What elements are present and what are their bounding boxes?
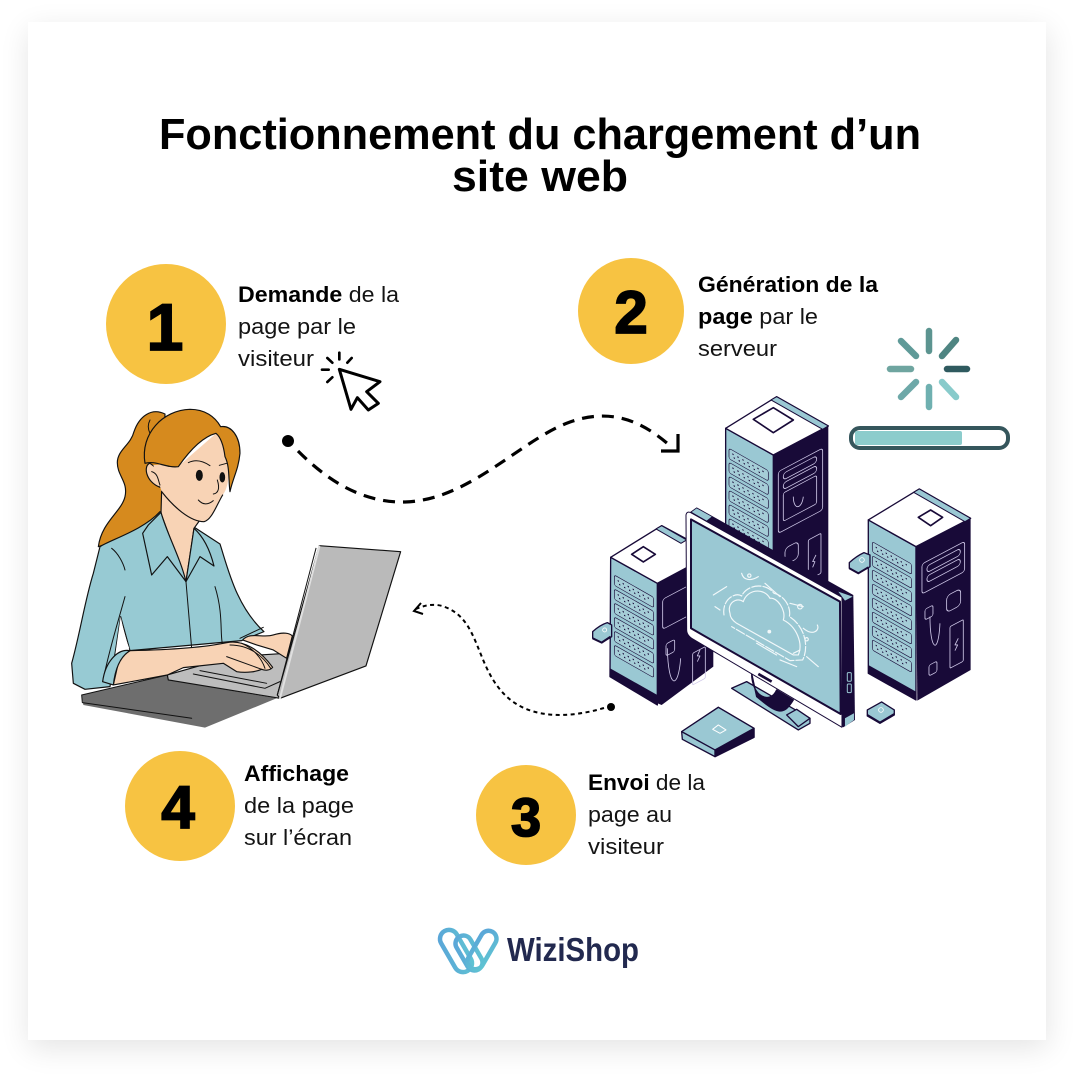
logo: WiziShop <box>437 927 639 975</box>
fingers <box>227 643 271 669</box>
sleeve cuff <box>103 650 130 685</box>
table <box>82 675 277 728</box>
step 4 badge: 4 <box>161 774 195 841</box>
icon: mouse cursor with click <box>322 353 380 410</box>
gap under arm <box>115 617 129 657</box>
step 3 badge <box>476 765 576 865</box>
laptop lid <box>277 546 401 698</box>
small device: middle <box>849 553 870 573</box>
step 3 badge: 3 <box>511 788 541 848</box>
ear <box>146 463 163 487</box>
progress bar <box>851 428 1008 448</box>
title: Fonctionnement du chargement d’un <box>159 110 921 159</box>
step 3 text: page au <box>588 802 672 827</box>
step 1 text: page par le <box>238 314 356 339</box>
small box device <box>682 707 754 757</box>
logo: WiziShop: WiziShop <box>507 931 639 968</box>
ponytail <box>98 412 167 547</box>
step 4 text: Affichage <box>244 761 349 786</box>
step 2 text <box>698 272 879 361</box>
small device: right <box>867 702 894 723</box>
step 3 text: visiteur <box>588 834 664 859</box>
step 1 text: visiteur <box>238 346 314 371</box>
face features <box>148 420 227 504</box>
step 2 badge: 2 <box>614 279 648 346</box>
far hand <box>243 633 292 658</box>
arrow: server to visitor <box>414 603 615 715</box>
server: right <box>868 489 971 701</box>
neck <box>161 490 200 582</box>
collar <box>143 512 214 582</box>
title <box>159 110 921 201</box>
monitor stand <box>732 673 810 730</box>
step 4 text <box>244 761 354 850</box>
server: back <box>726 397 828 583</box>
step 2 text: Génération de la <box>698 272 879 297</box>
face <box>153 430 229 522</box>
server: left <box>610 526 713 705</box>
step 2 text: serveur <box>698 336 777 361</box>
title: site web <box>452 152 628 201</box>
icon: logo W <box>437 927 499 975</box>
icon: loading spinner <box>890 331 967 407</box>
step 1 badge <box>106 264 226 384</box>
small device: left <box>593 623 612 643</box>
shirt seams <box>103 548 263 682</box>
step 2 text: page par le <box>698 304 818 329</box>
laptop base <box>167 653 290 698</box>
monitor <box>686 507 855 727</box>
illustration: woman with laptop <box>72 409 401 728</box>
step 4 badge <box>125 751 235 861</box>
step 4 text: de la page <box>244 793 354 818</box>
top hair <box>144 409 240 492</box>
step 1 text: Demande de la <box>238 282 400 307</box>
icon: cloud on screen <box>713 573 818 667</box>
step 1 text <box>238 282 400 371</box>
arrow: visitor to server <box>282 416 678 502</box>
step 4 text: sur l’écran <box>244 825 352 850</box>
step 2 badge <box>578 258 684 364</box>
step 3 text <box>588 770 706 859</box>
illustration: servers and monitor <box>593 397 971 757</box>
step 3 text: Envoi de la <box>588 770 706 795</box>
step 1 badge: 1 <box>147 290 183 364</box>
shirt <box>72 512 264 689</box>
forearm and hand <box>113 642 273 685</box>
